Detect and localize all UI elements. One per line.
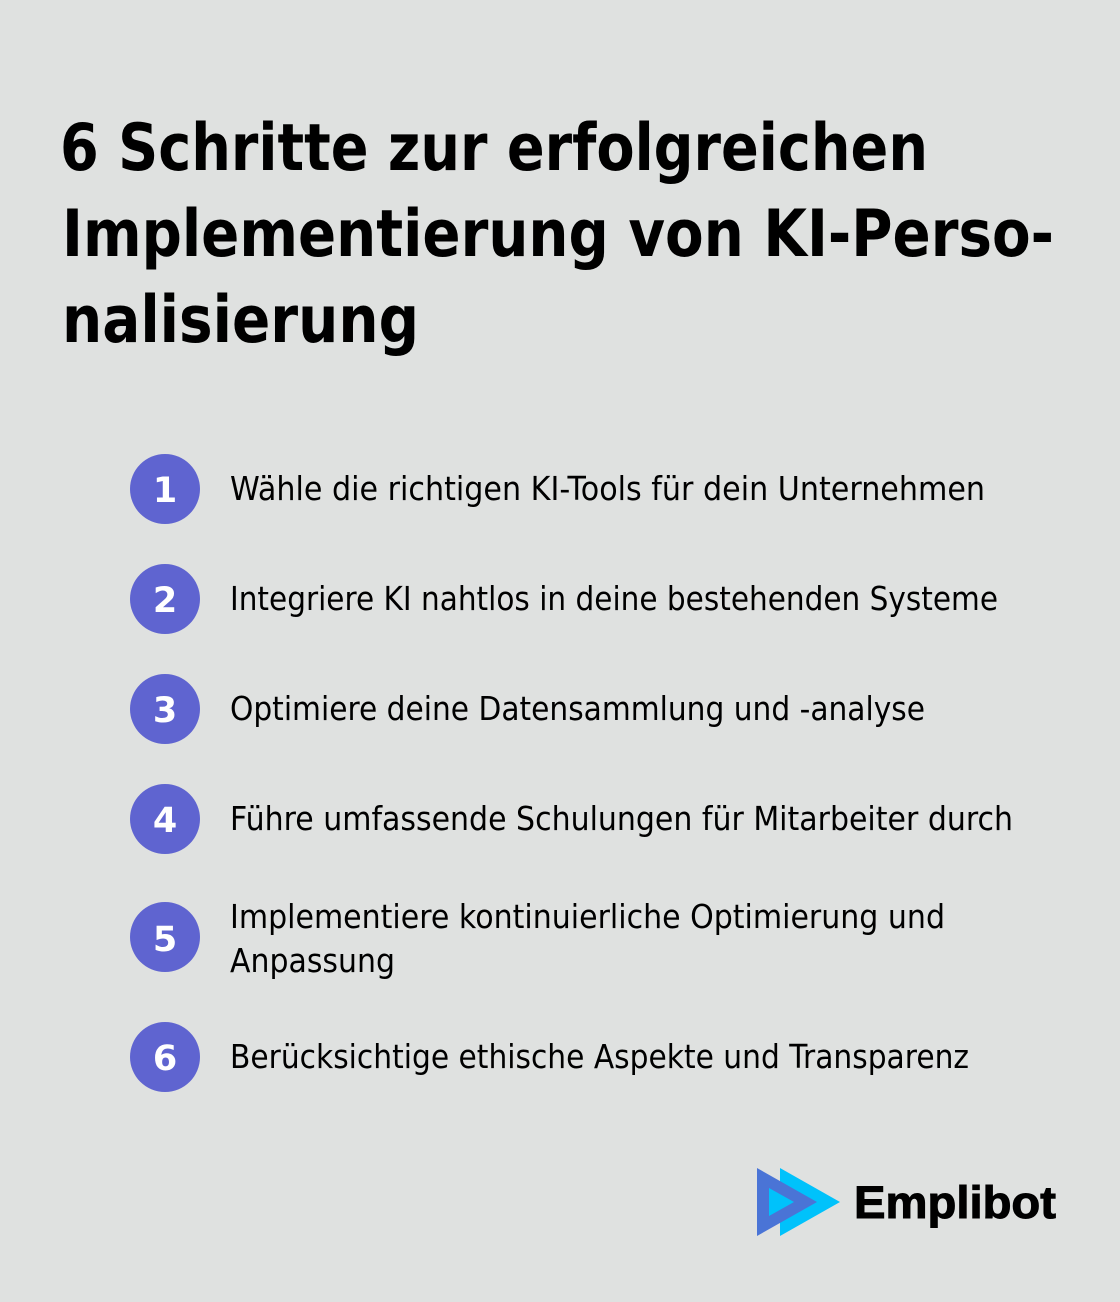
step 2: 2 bbox=[153, 581, 177, 621]
step 3: Optimiere deine Datensammlung und -analyse bbox=[230, 689, 925, 728]
step 6 bbox=[130, 1022, 969, 1092]
step 3: 3 bbox=[153, 691, 177, 731]
logo: Emplibot: Emplibot bbox=[854, 1177, 1056, 1228]
step 5: Anpassung bbox=[230, 941, 395, 980]
step 1 bbox=[130, 454, 985, 524]
step 5 bbox=[130, 897, 945, 980]
step 2: Integriere KI nahtlos in deine bestehenden Systeme bbox=[230, 579, 998, 618]
step 4: Führe umfassende Schulungen für Mitarbeiter durch bbox=[230, 799, 1013, 838]
step 1: 1 bbox=[153, 471, 177, 511]
title: 6 Schritte zur erfolgreichen bbox=[60, 111, 928, 186]
step 4 bbox=[130, 784, 1013, 854]
step 4: 4 bbox=[153, 801, 177, 841]
logo: Emplibot bbox=[757, 1168, 1056, 1236]
step 5: 5 bbox=[153, 920, 177, 960]
step 1: Wähle die richtigen KI-Tools für dein Unternehmen bbox=[230, 469, 985, 508]
title bbox=[60, 111, 1054, 358]
step 6: 6 bbox=[153, 1039, 177, 1079]
step 3 bbox=[130, 674, 925, 744]
step 2 bbox=[130, 564, 998, 634]
step 6: Berücksichtige ethische Aspekte und Transparenz bbox=[230, 1037, 969, 1076]
title: nalisierung bbox=[62, 283, 419, 358]
step 5: Implementiere kontinuierliche Optimierung und bbox=[230, 897, 945, 936]
